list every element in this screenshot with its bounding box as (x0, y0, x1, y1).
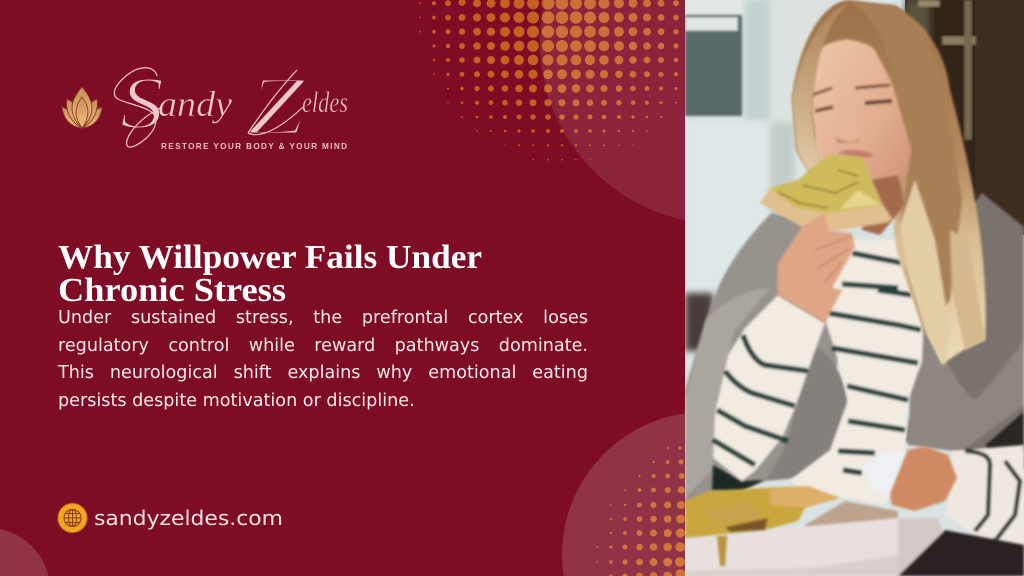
face (812, 39, 912, 235)
logo script name: Z (247, 60, 307, 153)
body text: Under sustained stress, the prefrontal cortex loses (58, 308, 588, 328)
body text: regulatory control while reward pathways dominate. (58, 336, 588, 356)
heading (58, 239, 482, 309)
body text (58, 308, 588, 411)
translucent circle: top right (540, 0, 685, 220)
photo: woman eating pizza (685, 0, 1024, 576)
logo script name: S (120, 63, 164, 145)
body text: persists despite motivation or discipline. (58, 391, 415, 411)
logo script name (120, 60, 348, 153)
panel: red background (0, 0, 685, 576)
blanket (685, 193, 1024, 505)
logo flourish strokes (114, 68, 303, 147)
logo: Sandy Zeldes (62, 60, 348, 153)
logo tagline: RESTORE YOUR BODY & YOUR MIND (161, 142, 347, 151)
halftone dots: bottom right (596, 446, 685, 576)
pizza box (685, 501, 1024, 576)
icon: lotus (62, 87, 102, 128)
sweater sleeve: left (712, 295, 825, 492)
photo background: dark shelves (905, 0, 1024, 235)
icon: globe (58, 504, 87, 532)
sweater sleeve: right (945, 445, 1024, 545)
heading: Chronic Stress (58, 272, 286, 309)
pizza on box (685, 486, 840, 566)
hair back (792, 0, 986, 365)
photo background: kitchen (685, 0, 1024, 576)
body text: This neurological shift explains why emotional eating (58, 363, 588, 383)
logo script name: eldes (302, 86, 348, 119)
front hair strands (792, 2, 985, 365)
sweater torso (790, 240, 925, 505)
translucent circle: bottom right (562, 413, 685, 576)
logo script name: andy (158, 84, 232, 124)
heading: Why Willpower Fails Under (58, 239, 482, 276)
website address: sandyzeldes.com (94, 506, 283, 530)
hand holding pizza (777, 213, 855, 323)
translucent circle: bottom left (0, 529, 48, 576)
pizza slice (760, 155, 893, 232)
halftone dots: top right (419, 0, 679, 160)
tissue and right hand (862, 446, 957, 511)
